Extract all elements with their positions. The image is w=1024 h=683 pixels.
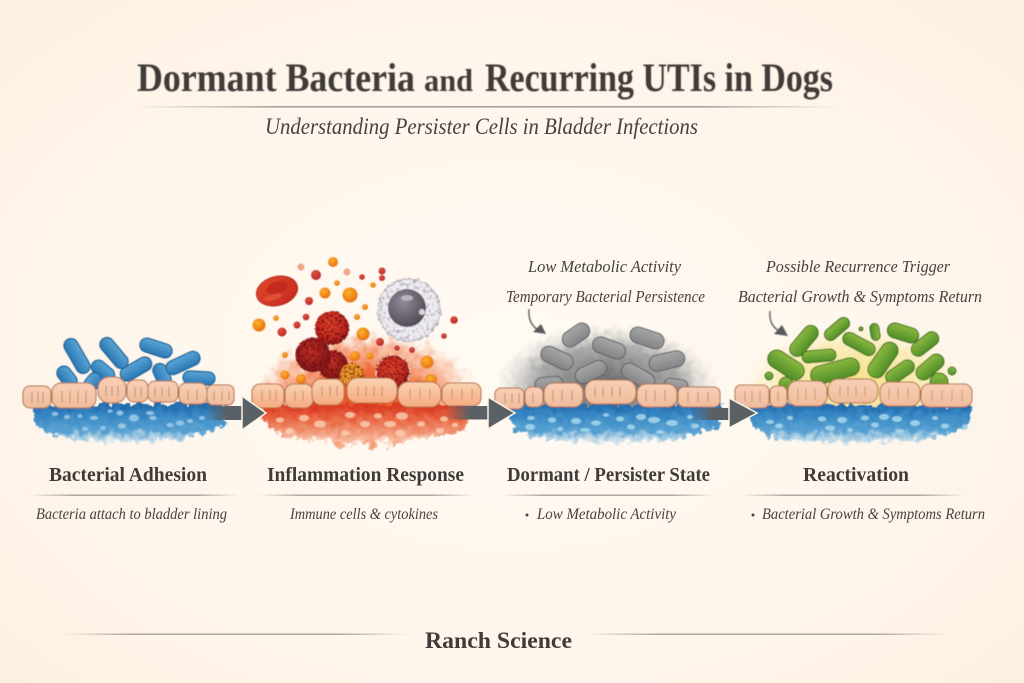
heading: reactivation: Reactivation	[803, 464, 909, 486]
bacteria: green active rods	[764, 315, 956, 391]
title	[137, 55, 833, 100]
epithelial cells	[252, 378, 481, 408]
bladder tissue layer: blue	[503, 404, 722, 443]
annotation: low metabolic activity: Low Metabolic Activity	[527, 257, 681, 276]
subtitle: Understanding Persister Cells in Bladder Infections	[265, 114, 698, 139]
bacteria: blue rods	[54, 335, 215, 394]
inflamed cells: raspberry clusters	[296, 311, 410, 389]
arrow: annotation pointer	[770, 311, 788, 336]
inflammation haze	[253, 312, 477, 444]
bladder tissue layer: blue	[748, 404, 972, 443]
epithelial cells	[23, 377, 234, 408]
arrow: step 1 to 2	[205, 396, 266, 430]
panel: bacterial adhesion	[23, 335, 234, 443]
cytokine particles	[252, 257, 458, 386]
red blood cell	[253, 272, 301, 310]
bladder tissue layer: blue	[32, 404, 228, 443]
epithelial cells	[495, 380, 720, 409]
panel: dormant persister state	[495, 309, 722, 443]
caption: reactivation: Bacterial Growth & Symptoms Return	[762, 506, 985, 523]
heading: bacterial adhesion: Bacterial Adhesion	[49, 464, 207, 486]
title: Recurring UTIs in Dogs	[485, 55, 833, 100]
yellow haze	[743, 314, 967, 430]
panel: inflammation response	[252, 257, 481, 444]
title: and	[424, 62, 473, 98]
caption: bacterial adhesion: Bacteria attach to bladder lining	[36, 506, 227, 523]
caption: dormant persister state: Low Metabolic Activity	[536, 506, 677, 523]
bladder tissue layer: red	[260, 404, 472, 443]
white blood cell	[378, 279, 440, 341]
footer brand: Ranch Science	[425, 628, 572, 653]
arrow: annotation pointer	[529, 309, 546, 334]
heading: dormant persister state: Dormant / Persister State	[507, 464, 710, 486]
arrow: step 3 to 4	[690, 398, 757, 428]
dormant haze	[495, 310, 719, 434]
epithelial cells	[735, 379, 972, 408]
arrow: step 2 to 3	[445, 397, 515, 429]
caption: inflammation response: Immune cells & cytokines	[289, 506, 438, 523]
annotation: possible recurrence trigger: Possible Recurrence Trigger	[765, 257, 950, 276]
bacteria: grey dormant rods	[534, 320, 689, 393]
panel: reactivation	[735, 311, 972, 443]
annotation: bacterial growth and symptoms return: Bacterial Growth & Symptoms Return	[738, 287, 982, 306]
title: Dormant Bacteria	[137, 55, 415, 100]
annotation: temporary bacterial persistence: Temporary Bacterial Persistence	[506, 287, 705, 306]
heading: inflammation response: Inflammation Response	[267, 464, 464, 486]
